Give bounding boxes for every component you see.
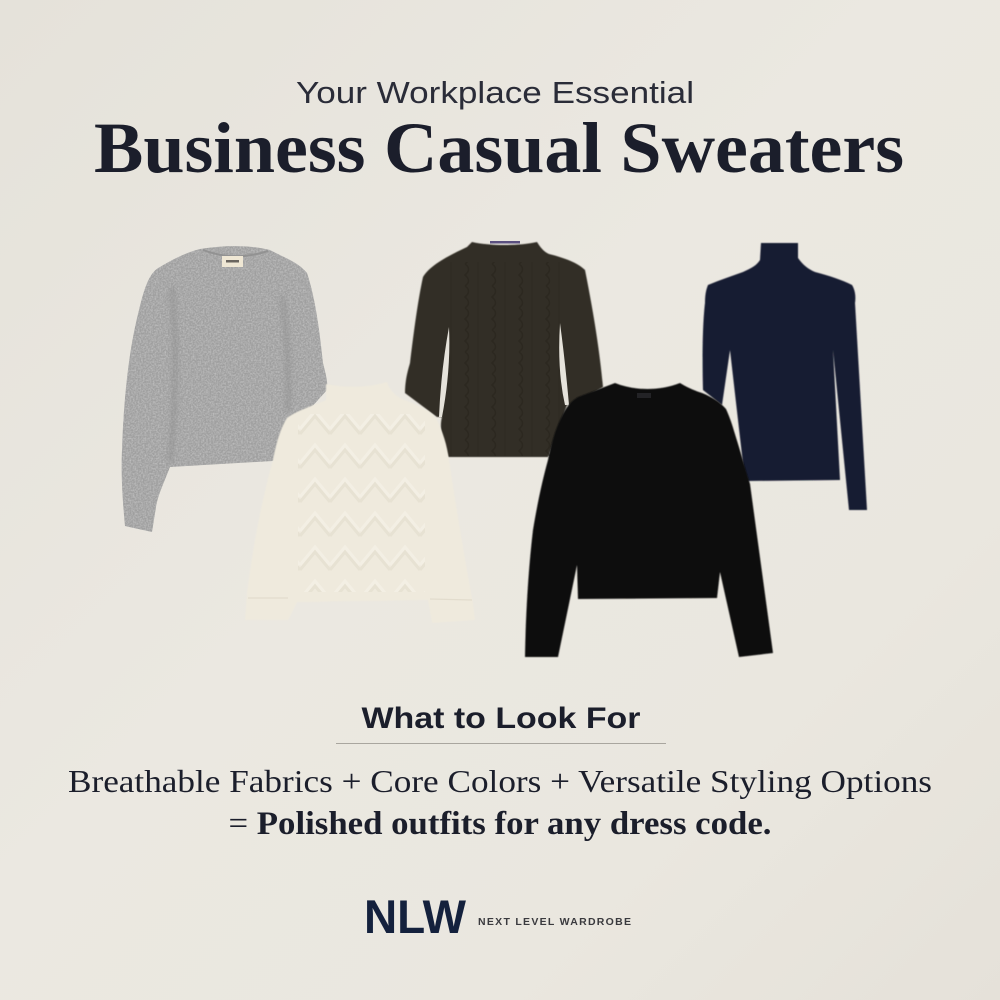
body text line one: Breathable Fabrics + Core Colors + Versatile Styling Options (68, 763, 932, 799)
logo: NLW (364, 890, 467, 943)
divider (336, 743, 666, 744)
logo (364, 890, 631, 943)
subtitle: Your Workplace Essential (296, 75, 694, 110)
sweater: grey crewneck (122, 246, 327, 532)
heading: what to look for: What to Look For (362, 702, 641, 735)
logo: NEXT LEVEL WARDROBE (478, 916, 631, 928)
title: Business Casual Sweaters (94, 108, 904, 188)
sweater: brown cable knit (405, 241, 603, 457)
body text line two: = Polished outfits for any dress code. (228, 806, 772, 842)
sweater: black crewneck (525, 383, 773, 657)
sweater: navy turtleneck (703, 243, 867, 510)
sweater: cream cable knit (245, 382, 475, 623)
